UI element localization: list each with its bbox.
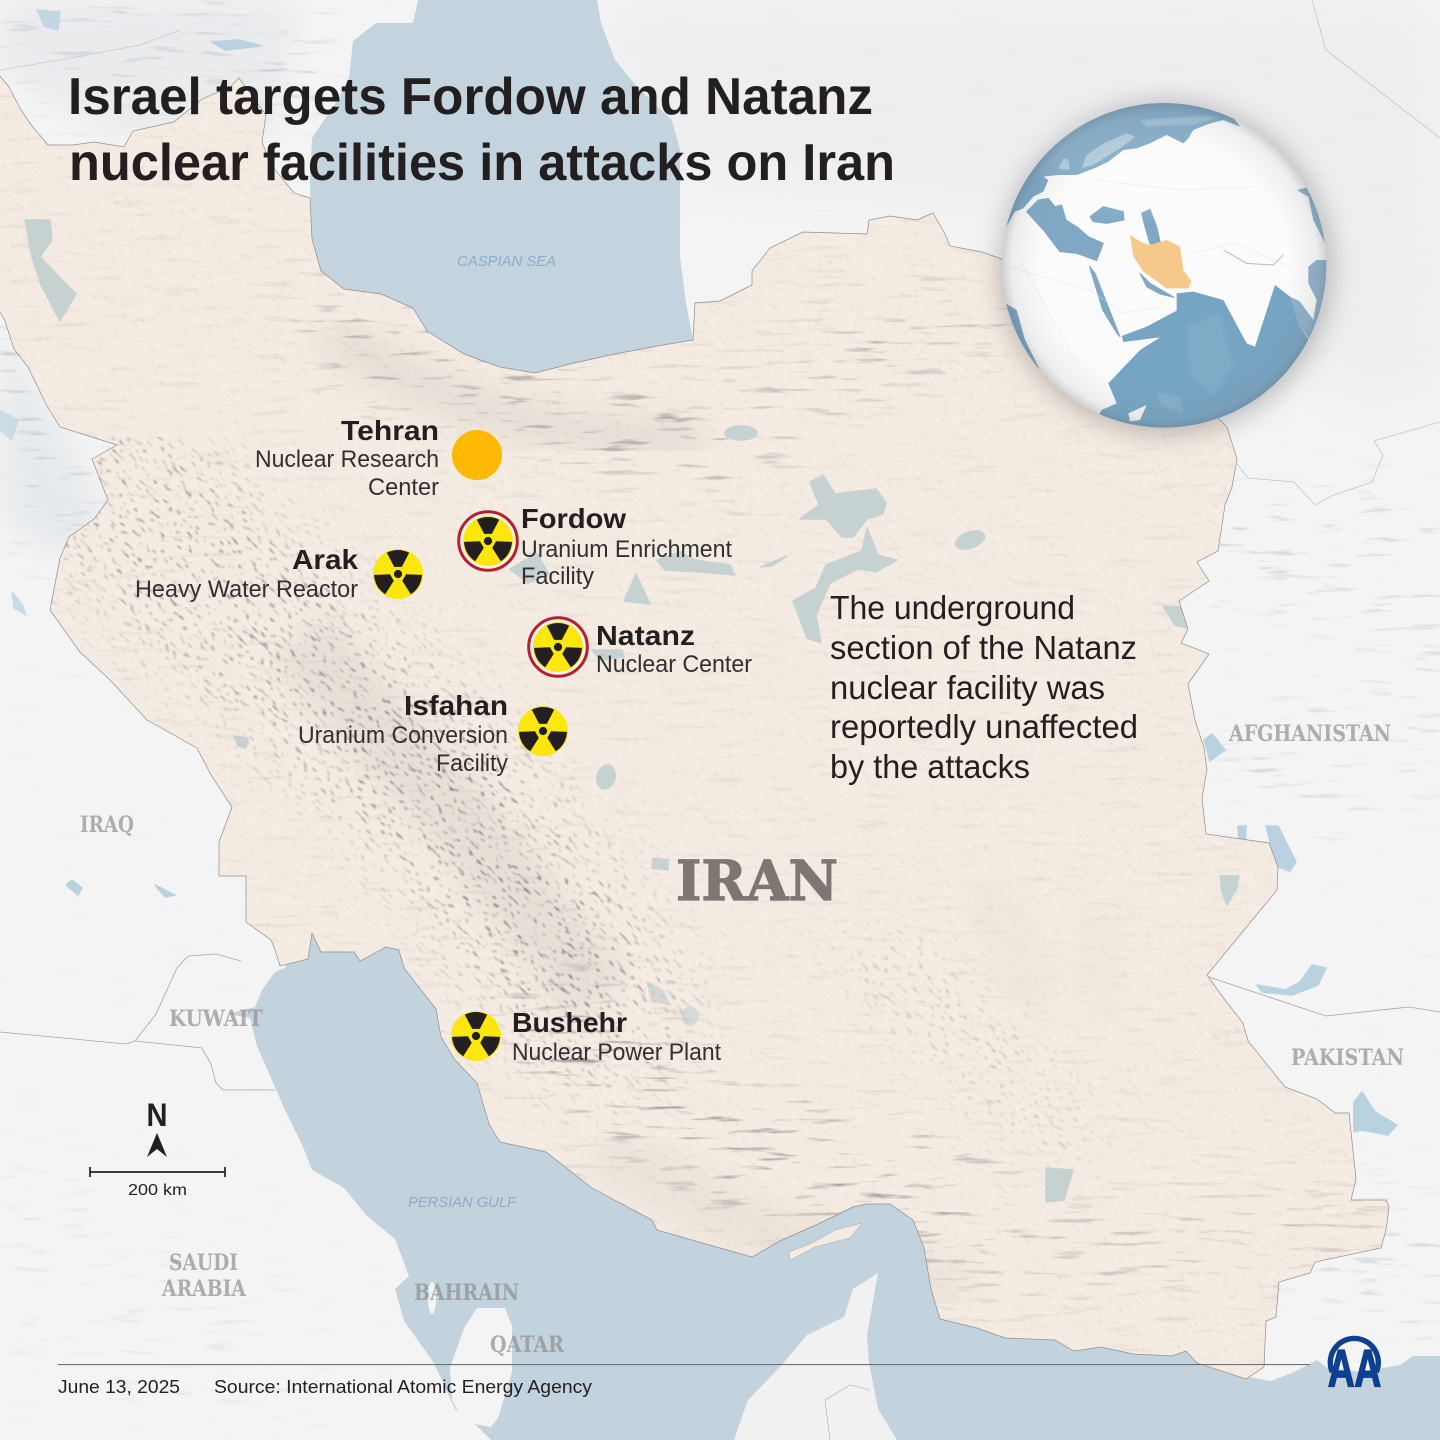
compass and scale bar: N [146,1097,168,1133]
caspian sea [310,0,693,373]
marker: fordow: Fordow [521,503,626,534]
marker: tehran: Center [368,474,439,501]
marker: arak: Heavy Water Reactor [135,576,358,603]
label: caspian sea: CASPIAN SEA [457,254,556,270]
lakes inside iran [25,220,1239,1202]
title: nuclear facilities in attacks on Iran [69,134,895,192]
marker: natanz [529,618,752,678]
lakes outside iran [0,10,1397,1135]
marker: tehran: Tehran [341,415,439,446]
footer date: June 13, 2025 [58,1377,180,1397]
title: Israel targets Fordow and Natanz [68,68,873,126]
marker: bushehr: Bushehr [512,1007,627,1038]
marker: arak: Arak [292,544,358,575]
marker: isfahan [298,690,569,777]
country label: qatar: QATAR [490,1332,565,1358]
marker: isfahan: Isfahan [404,690,508,721]
marker: tehran: Nuclear Research [255,446,439,473]
country label: iraq: IRAQ [80,812,134,838]
marker: fordow: Uranium Enrichment [521,536,732,563]
country label: kuwait: KUWAIT [169,1006,264,1032]
land: bahrain [428,1282,436,1314]
callout text: by the attacks [830,748,1030,785]
persian gulf and gulf of oman [228,920,1440,1440]
locator globe [990,90,1347,447]
marker: natanz: Nuclear Center [596,651,752,678]
footer rule [58,1364,1310,1365]
globe: atlantic [990,300,1043,387]
marker: fordow [459,503,732,590]
callout text: nuclear facility was [830,669,1105,706]
marker: bushehr [450,1007,721,1066]
land: uae and oman [734,1273,897,1440]
globe: mediterranean and black sea [1027,198,1174,337]
callout text [830,589,1138,785]
globe: iran highlight [1130,235,1192,288]
marker: isfahan: Facility [436,750,508,777]
globe: northern seas [993,90,1240,237]
marker: tehran [255,415,502,501]
marker: natanz: Natanz [596,620,695,651]
globe: country borders [1007,180,1290,363]
country label: pakistan: PAKISTAN [1291,1045,1404,1071]
title [68,68,895,192]
footer source: Source: International Atomic Energy Agency [214,1377,592,1397]
country label: saudi arabia: SAUDI [169,1250,238,1276]
marker: bushehr: Nuclear Power Plant [512,1039,721,1066]
land: qatar [450,1308,512,1427]
globe: indian ocean [1080,285,1347,447]
country label: iran: IRAN [676,848,838,913]
marker: isfahan: Uranium Conversion [298,722,508,749]
marker: fordow: Facility [521,563,594,590]
globe: east asia seas [1290,180,1337,340]
country label: saudi arabia: ARABIA [161,1276,247,1302]
country label: bahrain: BAHRAIN [414,1280,519,1306]
marker: arak [135,544,424,603]
country label: afghanistan: AFGHANISTAN [1228,721,1391,747]
compass and scale bar: 200 km [128,1182,187,1199]
callout text: section of the Natanz [830,629,1137,666]
logo: anadolu agency [1328,1338,1381,1398]
label: persian gulf: PERSIAN GULF [408,1195,517,1211]
country label: saudi arabia [161,1250,247,1302]
callout text: reportedly unaffected [830,708,1138,745]
callout text: The underground [830,589,1075,626]
qeshm island [789,1223,862,1260]
logo: anadolu agency: AA [1328,1340,1381,1398]
compass and scale bar [90,1097,225,1199]
